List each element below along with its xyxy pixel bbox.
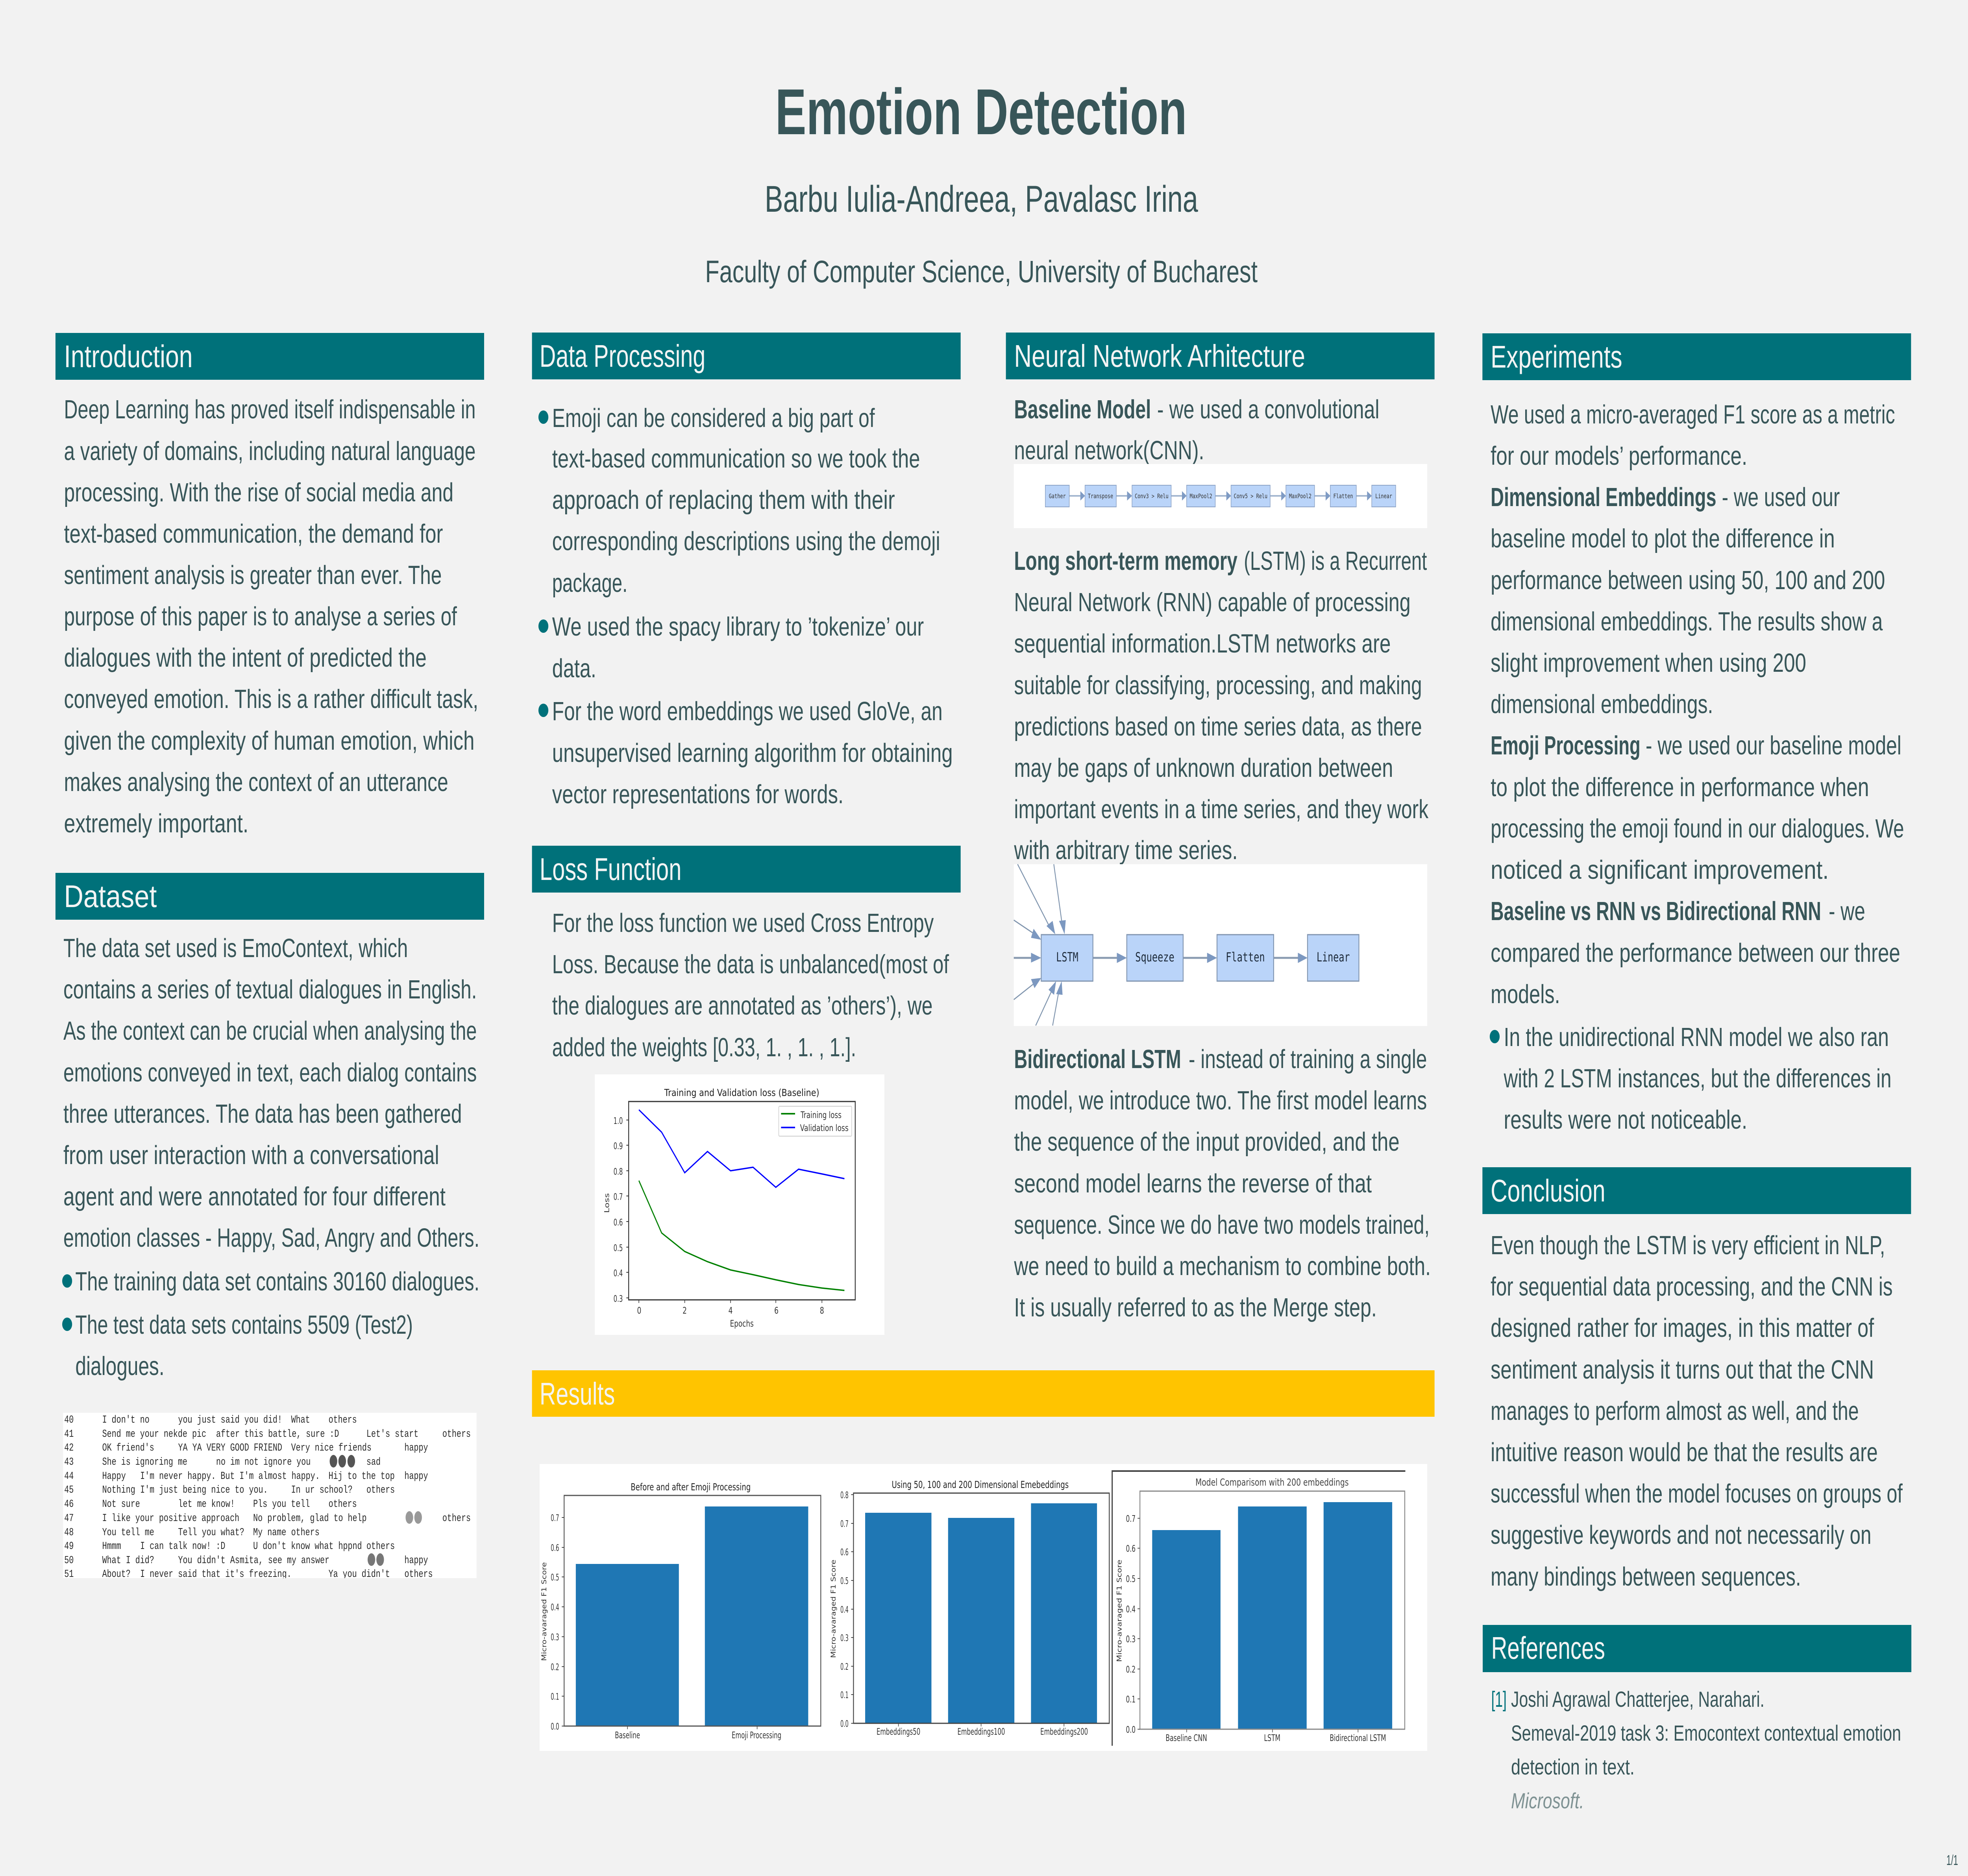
line chart: training and validation loss: 0.4 xyxy=(614,1268,623,1279)
bullet list: data processing: approach of replacing them with their xyxy=(552,486,895,515)
figure: dataset table sample: I'm never happy. But I'm almost happy. xyxy=(140,1470,320,1482)
text block: loss function: For the loss function we used Cross Entropy xyxy=(552,909,934,938)
text block: conclusion xyxy=(1491,1231,1903,1591)
text block: experiments: Baseline vs RNN vs Bidirectional RNN xyxy=(1491,897,1821,926)
bullet list: data processing: For the word embeddings we used GloVe, an xyxy=(552,697,943,726)
text block: LSTM: with arbitrary time series. xyxy=(1014,836,1238,865)
text block: introduction: purpose of this paper is to analyse a series of xyxy=(64,602,457,631)
figure: dataset table sample: others xyxy=(442,1512,471,1525)
panel: introduction xyxy=(55,333,484,838)
figure: dataset table sample: Send me your nekde pic xyxy=(102,1428,206,1440)
text block: baseline model: Baseline Model xyxy=(1014,395,1151,424)
figure: dataset table sample: Nothing xyxy=(102,1484,135,1496)
bar chart: model comparison: Model Comparisom with 200 embeddings xyxy=(1195,1477,1349,1488)
text block: experiments: for our models’ performance. xyxy=(1491,442,1747,471)
heading: conclusion: Conclusion xyxy=(1491,1173,1605,1208)
text block: bidirectional LSTM: second model learns the reverse of that xyxy=(1014,1169,1372,1198)
bar chart: 50, 100 and 200 dimensional embeddings: 0.4 xyxy=(840,1604,849,1615)
heading: data processing: Data Processing xyxy=(540,338,705,373)
text block: introduction: makes analysing the context of an utterance xyxy=(64,768,448,797)
figure: dataset table sample xyxy=(63,1413,477,1583)
figure: dataset table sample: 43 xyxy=(64,1456,74,1468)
figure: dataset table sample: OK friend's xyxy=(102,1442,154,1454)
text block: dataset description xyxy=(63,934,479,1253)
text block: introduction: a variety of domains, including natural language xyxy=(64,437,475,466)
panel: references xyxy=(1483,1625,1911,1813)
figure: dataset table sample: I'm just being nice to you. xyxy=(140,1484,268,1496)
diagram: CNN pipeline xyxy=(1014,464,1427,528)
panel: loss function xyxy=(532,846,961,1335)
text block: experiments: Dimensional Embeddings xyxy=(1491,483,1716,512)
panel: dataset xyxy=(55,873,484,1583)
chart legend: Validation loss xyxy=(800,1122,849,1133)
line chart: training and validation loss: 0.6 xyxy=(614,1217,623,1228)
bullet list: data processing xyxy=(538,404,953,809)
figure: dataset table sample: Tell you what? xyxy=(178,1527,244,1539)
bar chart: before and after emoji processing: 0.7 xyxy=(551,1512,559,1523)
heading: results xyxy=(532,1370,1435,1417)
diagram: CNN pipeline: Gather xyxy=(1049,493,1066,500)
figure: dataset table sample: In ur school? xyxy=(291,1484,353,1496)
bullet list: data processing: data. xyxy=(552,654,596,683)
line chart: training and validation loss: 0.3 xyxy=(614,1293,623,1304)
heading: dataset xyxy=(55,873,484,920)
text block: conclusion: designed rather for images, in this matter of xyxy=(1491,1314,1874,1343)
text block: LSTM: important events in a time series, and they work xyxy=(1014,795,1429,824)
bullet list: dataset sizes: The training data set contains 30160 dialogues. xyxy=(75,1267,479,1296)
text block: bidirectional LSTM: sequence. Since we do have two models trained, xyxy=(1014,1211,1430,1240)
text block: conclusion: sentiment analysis it turns out that the CNN xyxy=(1491,1355,1874,1384)
bullet list: data processing: corresponding descriptions using the demoji xyxy=(552,527,940,556)
bar chart: model comparison: 0.4 xyxy=(1126,1604,1136,1615)
reference entry: Joshi Agrawal Chatterjee, Narahari. xyxy=(1511,1687,1765,1712)
text block: experiments: Emoji Processing xyxy=(1491,731,1641,760)
text block: introduction: conveyed emotion. This is a rather difficult task, xyxy=(64,685,478,714)
panel: data processing xyxy=(532,333,961,809)
figure: dataset table sample: I don't no xyxy=(102,1414,150,1426)
bar chart: model comparison: Bidirectional LSTM xyxy=(1330,1732,1386,1743)
text block: experiments: - we xyxy=(1829,897,1865,926)
figure: dataset table sample: I never said that it's freezing. xyxy=(140,1568,292,1580)
figure: dataset table sample: 46 xyxy=(64,1498,74,1510)
figure: dataset table sample: What xyxy=(291,1414,310,1426)
line chart: training and validation loss: 0.8 xyxy=(614,1166,623,1177)
text block: bidirectional LSTM: model, we introduce two. The first model learns xyxy=(1014,1086,1427,1115)
heading: introduction: Introduction xyxy=(64,338,193,374)
line chart: training and validation loss: 1.0 xyxy=(614,1115,623,1126)
line chart: training and validation loss: 4 xyxy=(729,1305,733,1316)
line chart: training and validation loss: 0 xyxy=(637,1305,641,1316)
bar chart: before and after emoji processing: Baseline xyxy=(615,1730,640,1741)
diagram: CNN pipeline: Transpose xyxy=(1088,493,1113,500)
bullet list: experiments: results were not noticeable. xyxy=(1504,1105,1747,1135)
figure: dataset table sample: others xyxy=(291,1527,320,1539)
line chart: training and validation loss: 8 xyxy=(820,1305,824,1316)
heading: conclusion xyxy=(1482,1167,1911,1214)
title: Emotion Detection xyxy=(775,75,1187,148)
figure: dataset table sample: U don't know what hppnd xyxy=(253,1540,362,1553)
line chart: training and validation loss: 0.7 xyxy=(614,1191,623,1202)
text block: bidirectional LSTM: - instead of training a single xyxy=(1189,1045,1427,1074)
line chart: training and validation loss: 0.5 xyxy=(614,1242,623,1253)
bar chart: before and after emoji processing: 0.3 xyxy=(551,1632,559,1643)
text block: LSTM: may be gaps of unknown duration between xyxy=(1014,754,1393,783)
heading: dataset: Dataset xyxy=(64,878,157,914)
figure: dataset table sample: About? xyxy=(102,1568,131,1580)
text block: experiments: slight improvement when using 200 xyxy=(1491,649,1806,678)
bar chart: model comparison xyxy=(1112,1471,1405,1746)
bar chart: 50, 100 and 200 dimensional embeddings: 0.8 xyxy=(840,1490,849,1501)
bar chart: before and after emoji processing: 0.0 xyxy=(551,1721,559,1732)
text block: baseline model xyxy=(1014,395,1379,465)
bar chart: 50, 100 and 200 dimensional embeddings: 0.2 xyxy=(840,1661,849,1672)
text block: experiments xyxy=(1491,400,1904,1009)
text block: LSTM: (LSTM) is a Recurrent xyxy=(1244,547,1427,576)
bar chart: before and after emoji processing: 0.2 xyxy=(551,1662,559,1673)
heading: loss function: Loss Function xyxy=(540,851,681,887)
line chart: training and validation loss: Loss xyxy=(603,1193,611,1213)
reference entry: Microsoft. xyxy=(1511,1789,1584,1813)
text block: bidirectional LSTM: we need to build a mechanism to combine both. xyxy=(1014,1252,1431,1281)
figure: dataset table sample: after this battle, sure :D xyxy=(216,1428,339,1440)
heading: experiments xyxy=(1482,333,1911,380)
text block: introduction xyxy=(64,395,478,838)
diagram: CNN pipeline: Linear xyxy=(1375,493,1392,500)
bar chart: before and after emoji processing: Emoji Processing xyxy=(732,1730,781,1741)
bullet list: dataset sizes: The test data sets contains 5509 (Test2) xyxy=(75,1310,413,1340)
figure: dataset table sample: 51 xyxy=(64,1568,74,1580)
authors: Barbu Iulia-Andreea, Pavalasc Irina xyxy=(765,178,1198,220)
reference entry: [1] xyxy=(1491,1687,1507,1712)
heading: experiments: Experiments xyxy=(1491,339,1622,374)
text block: conclusion: intuitive reason would be that the results are xyxy=(1491,1438,1878,1467)
text block: bidirectional LSTM: the sequence of the input provided, and the xyxy=(1014,1127,1400,1157)
reference entry xyxy=(1491,1687,1901,1813)
bullet list: dataset sizes: dialogues. xyxy=(75,1352,165,1381)
reference entry: Semeval-2019 task 3: Emocontext contextual emotion xyxy=(1511,1721,1901,1745)
bar chart: 50, 100 and 200 dimensional embeddings: 0.5 xyxy=(840,1575,849,1586)
figure: dataset table sample: What I did? xyxy=(102,1554,154,1567)
text block: dataset description: emotions conveyed in text, each dialog contains xyxy=(63,1058,477,1087)
figure: dataset table sample: She is ignoring me xyxy=(102,1456,187,1468)
figure: dataset table sample: Hmmm xyxy=(102,1540,121,1553)
figure: dataset table sample: happy xyxy=(404,1442,428,1454)
figure: dataset table sample: 49 xyxy=(64,1540,74,1553)
figure: dataset table sample: happy xyxy=(404,1554,428,1567)
heading: references: References xyxy=(1491,1630,1605,1665)
text block: experiments: - we used our baseline model xyxy=(1646,731,1901,760)
bar chart: 50, 100 and 200 dimensional embeddings: Using 50, 100 and 200 Dimensional Emebeddings xyxy=(892,1479,1069,1491)
bullet list: data processing: Emoji can be considered a big part of xyxy=(552,404,875,433)
figure: dataset table sample: I like your positive approach xyxy=(102,1512,239,1525)
text block: bidirectional LSTM: Bidirectional LSTM xyxy=(1014,1045,1181,1074)
bar chart: model comparison: 0.7 xyxy=(1126,1513,1136,1524)
bar chart: before and after emoji processing: Before and after Emoji Processing xyxy=(631,1482,751,1493)
text block: LSTM: predictions based on time series data, as there xyxy=(1014,712,1422,741)
text block: experiments: baseline model to plot the difference in xyxy=(1491,524,1835,553)
text block: LSTM: suitable for classifying, processing, and making xyxy=(1014,671,1422,700)
diagram: CNN pipeline: MaxPool2 xyxy=(1289,493,1311,500)
text block: experiments: models. xyxy=(1491,980,1560,1009)
bar chart: before and after emoji processing: Micro-avaraged F1 Score xyxy=(540,1562,548,1661)
bar chart: before and after emoji processing: 0.5 xyxy=(551,1572,559,1583)
text block: loss function: Loss. Because the data is unbalanced(most of xyxy=(552,950,949,979)
bar chart: model comparison: Micro-avaraged F1 Score xyxy=(1115,1560,1123,1662)
figure: dataset table sample: you just said you did! xyxy=(178,1414,282,1426)
figure: dataset table sample: Ya you didn't xyxy=(329,1568,390,1580)
text block: LSTM: Neural Network (RNN) capable of processing xyxy=(1014,588,1411,617)
figure: dataset table sample: sad xyxy=(366,1456,381,1468)
text block: conclusion: Even though the LSTM is very efficient in NLP, xyxy=(1491,1231,1885,1260)
bar chart: 50, 100 and 200 dimensional embeddings xyxy=(829,1479,1109,1737)
diagram: CNN pipeline: MaxPool2 xyxy=(1190,493,1212,500)
figure: dataset table sample: My name xyxy=(253,1527,286,1539)
figure: dataset table sample: You tell me xyxy=(102,1527,154,1539)
text block: loss function xyxy=(552,909,949,1062)
figure: dataset table sample: Hij to the top xyxy=(329,1470,395,1482)
diagram: LSTM pipeline: LSTM xyxy=(1056,950,1078,965)
chart legend xyxy=(779,1106,852,1136)
text block: baseline model: - we used a convolutional xyxy=(1157,395,1379,424)
text block: conclusion: for sequential data processing, and the CNN is xyxy=(1491,1272,1893,1301)
bar chart: before and after emoji processing xyxy=(540,1482,821,1741)
bar chart: before and after emoji processing: 0.1 xyxy=(551,1691,559,1702)
bar chart: before and after emoji processing: 0.4 xyxy=(551,1602,559,1613)
bullet list: dataset sizes xyxy=(62,1267,479,1381)
diagram: CNN pipeline: Flatten xyxy=(1333,493,1353,500)
heading: neural network architecture xyxy=(1006,333,1435,379)
panel: experiments xyxy=(1482,333,1911,1135)
line chart: training and validation loss: 0.9 xyxy=(614,1140,623,1151)
bar chart: model comparison: 0.1 xyxy=(1126,1694,1136,1705)
line chart: training and validation loss: 6 xyxy=(774,1305,779,1316)
results figure background xyxy=(540,1464,1427,1751)
text block: experiments: dimensional embeddings. The results show a xyxy=(1491,607,1883,636)
text block: introduction: sentiment analysis is greater than ever. The xyxy=(64,561,442,590)
diagram: LSTM pipeline: Squeeze xyxy=(1135,950,1175,965)
text block: loss function: the dialogues are annotated as ’others’), we xyxy=(552,991,932,1020)
text block: dataset description: emotion classes - Happy, Sad, Angry and Others. xyxy=(63,1224,479,1253)
figure: dataset table sample: others xyxy=(366,1540,395,1553)
figure: dataset table sample: Not sure xyxy=(102,1498,140,1510)
figure: dataset table sample: happy xyxy=(404,1470,428,1482)
figure: dataset table sample: No problem, glad to help xyxy=(253,1512,367,1525)
figure: dataset table sample: others xyxy=(404,1568,433,1580)
bullet list: data processing: text-based communication so we took the xyxy=(552,444,920,473)
figure: dataset table sample: 41 xyxy=(64,1428,74,1440)
bar chart: 50, 100 and 200 dimensional embeddings: 0.7 xyxy=(840,1518,849,1529)
line chart: training and validation loss xyxy=(595,1074,884,1335)
figure: dataset table sample: others xyxy=(442,1428,471,1440)
figure: dataset table sample: others xyxy=(329,1498,357,1510)
heading: neural network architecture: Neural Network Arhitecture xyxy=(1014,338,1305,373)
panel: conclusion xyxy=(1482,1167,1911,1591)
bar chart: model comparison: 0.3 xyxy=(1126,1634,1136,1645)
text block: experiments: We used a micro-averaged F1 score as a metric xyxy=(1491,400,1895,429)
figure: dataset table sample: I can talk now! :D xyxy=(140,1540,225,1553)
heading: introduction xyxy=(55,333,484,380)
text block: dataset description: agent and were annotated for four different xyxy=(63,1182,446,1211)
figure: dataset table sample: 42 xyxy=(64,1442,74,1454)
heading: references xyxy=(1483,1625,1911,1672)
text block: introduction: text-based communication, the demand for xyxy=(64,519,443,549)
text block: experiments: processing the emoji found in our dialogues. We xyxy=(1491,814,1904,843)
text block: introduction: extremely important. xyxy=(64,809,248,838)
text block: dataset description: three utterances. The data has been gathered xyxy=(63,1100,462,1129)
figure: dataset table sample: Happy xyxy=(102,1470,126,1482)
figure: dataset table sample: Very nice friends xyxy=(291,1442,372,1454)
text block: baseline model: neural network(CNN). xyxy=(1014,436,1204,465)
bar chart: 50, 100 and 200 dimensional embeddings: Embeddings50 xyxy=(877,1726,920,1737)
heading: results: Results xyxy=(540,1376,615,1411)
text block: dataset description: contains a series of textual dialogues in English. xyxy=(63,975,477,1004)
text block: experiments: dimensional embeddings. xyxy=(1491,690,1713,719)
figure: dataset table sample: let me know! xyxy=(178,1498,235,1510)
figure: dataset table sample: others xyxy=(366,1484,395,1496)
diagram: LSTM pipeline: Linear xyxy=(1317,950,1350,965)
bar chart: model comparison: 0.2 xyxy=(1126,1664,1136,1675)
figure: dataset table sample: Pls you tell xyxy=(253,1498,310,1510)
text block: conclusion: successful when the model focuses on groups of xyxy=(1491,1479,1903,1508)
bar chart: model comparison: 0.5 xyxy=(1126,1573,1136,1584)
diagram: LSTM pipeline: Flatten xyxy=(1226,950,1265,965)
figure: dataset table sample: You didn't Asmita, see my answer xyxy=(178,1554,329,1567)
text block: conclusion: suggestive keywords and not necessarily on xyxy=(1491,1521,1871,1550)
page number: 1/1 xyxy=(1946,1852,1958,1868)
panel: results xyxy=(532,1370,1435,1751)
figure: dataset table sample: 44 xyxy=(64,1470,74,1482)
diagram: CNN pipeline: Conv5 > Relu xyxy=(1234,493,1267,500)
text block: experiments: compared the performance between our three xyxy=(1491,939,1900,968)
text block: introduction: given the complexity of human emotion, which xyxy=(64,726,474,756)
bar chart: model comparison: LSTM xyxy=(1264,1732,1280,1743)
affiliation: Faculty of Computer Science, University of Bucharest xyxy=(705,254,1258,289)
text block: experiments: - we used our xyxy=(1722,483,1840,512)
bullet list: data processing: We used the spacy library to ’tokenize’ our xyxy=(552,612,924,641)
bar chart: 50, 100 and 200 dimensional embeddings: 0.0 xyxy=(840,1718,849,1729)
line chart: training and validation loss: Training and Validation loss (Baseline) xyxy=(664,1087,819,1099)
bar chart: 50, 100 and 200 dimensional embeddings: Embeddings200 xyxy=(1040,1726,1088,1737)
text block: introduction: Deep Learning has proved itself indispensable in xyxy=(64,395,475,424)
figure: dataset table sample: 47 xyxy=(64,1512,74,1525)
text block: experiments: performance between using 50, 100 and 200 xyxy=(1491,566,1885,595)
figure: dataset table sample: 50 xyxy=(64,1554,74,1567)
text block: dataset description: from user interaction with a conversational xyxy=(63,1141,439,1170)
heading: data processing xyxy=(532,333,961,379)
text block: LSTM: Long short-term memory xyxy=(1014,547,1237,576)
bar chart: model comparison: 0.6 xyxy=(1126,1543,1136,1554)
diagram: CNN pipeline: Conv3 > Relu xyxy=(1135,493,1169,500)
figure: dataset table sample: 40 xyxy=(64,1414,74,1426)
chart legend: Training loss xyxy=(800,1109,842,1120)
panel: neural network architecture xyxy=(1006,333,1435,1322)
bar chart: 50, 100 and 200 dimensional embeddings: 0.6 xyxy=(840,1547,849,1558)
text block: bidirectional LSTM xyxy=(1014,1045,1431,1322)
text block: experiments: to plot the difference in performance when xyxy=(1491,773,1869,802)
bar chart: model comparison: 0.0 xyxy=(1126,1724,1136,1735)
bullet list: experiments xyxy=(1490,1023,1892,1135)
figure: dataset table sample: Let's start xyxy=(366,1428,418,1440)
reference entry: detection in text. xyxy=(1511,1755,1635,1779)
bullet list: data processing: package. xyxy=(552,569,627,598)
text block: conclusion: manages to perform almost as well, and the xyxy=(1491,1397,1859,1426)
text block: dataset description: As the context can be crucial when analysing the xyxy=(63,1017,477,1046)
figure: dataset table sample: YA YA VERY GOOD FRIEND xyxy=(178,1442,282,1454)
figure: dataset table sample: 48 xyxy=(64,1527,74,1539)
text block: introduction: processing. With the rise of social media and xyxy=(64,478,453,507)
figure: dataset table sample: 45 xyxy=(64,1484,74,1496)
figure: dataset table sample: others xyxy=(329,1414,357,1426)
text block: experiments: noticed a significant improvement. xyxy=(1491,856,1829,885)
line chart: training and validation loss: Epochs xyxy=(730,1318,754,1329)
bar chart: model comparison: Baseline CNN xyxy=(1165,1732,1207,1743)
text block: LSTM xyxy=(1014,547,1429,865)
bullet list: experiments: with 2 LSTM instances, but the differences in xyxy=(1504,1064,1892,1093)
line chart: training and validation loss: 2 xyxy=(683,1305,687,1316)
text block: bidirectional LSTM: It is usually referred to as the Merge step. xyxy=(1014,1293,1377,1322)
diagram: LSTM pipeline xyxy=(1014,864,1427,1026)
text block: conclusion: many bindings between sequences. xyxy=(1491,1562,1801,1591)
bar chart: 50, 100 and 200 dimensional embeddings: 0.3 xyxy=(840,1632,849,1643)
text block: dataset description: The data set used is EmoContext, which xyxy=(63,934,408,963)
text block: introduction: dialogues with the intent of predicted the xyxy=(64,643,427,673)
bar chart: 50, 100 and 200 dimensional embeddings: Embeddings100 xyxy=(957,1726,1005,1737)
text block: loss function: added the weights [0.33, 1. , 1. , 1.]. xyxy=(552,1033,856,1062)
text block: LSTM: sequential information.LSTM networks are xyxy=(1014,629,1391,658)
bullet list: data processing: unsupervised learning algorithm for obtaining xyxy=(552,739,953,768)
bullet list: experiments: In the unidirectional RNN model we also ran xyxy=(1504,1023,1889,1052)
bar chart: 50, 100 and 200 dimensional embeddings: Micro-avaraged F1 Score xyxy=(829,1560,837,1658)
heading: loss function xyxy=(532,846,961,893)
bar chart: before and after emoji processing: 0.6 xyxy=(551,1542,559,1553)
bullet list: data processing: vector representations for words. xyxy=(552,780,843,809)
bar chart: 50, 100 and 200 dimensional embeddings: 0.1 xyxy=(840,1689,849,1700)
figure: dataset table sample: no im not ignore you xyxy=(216,1456,311,1468)
